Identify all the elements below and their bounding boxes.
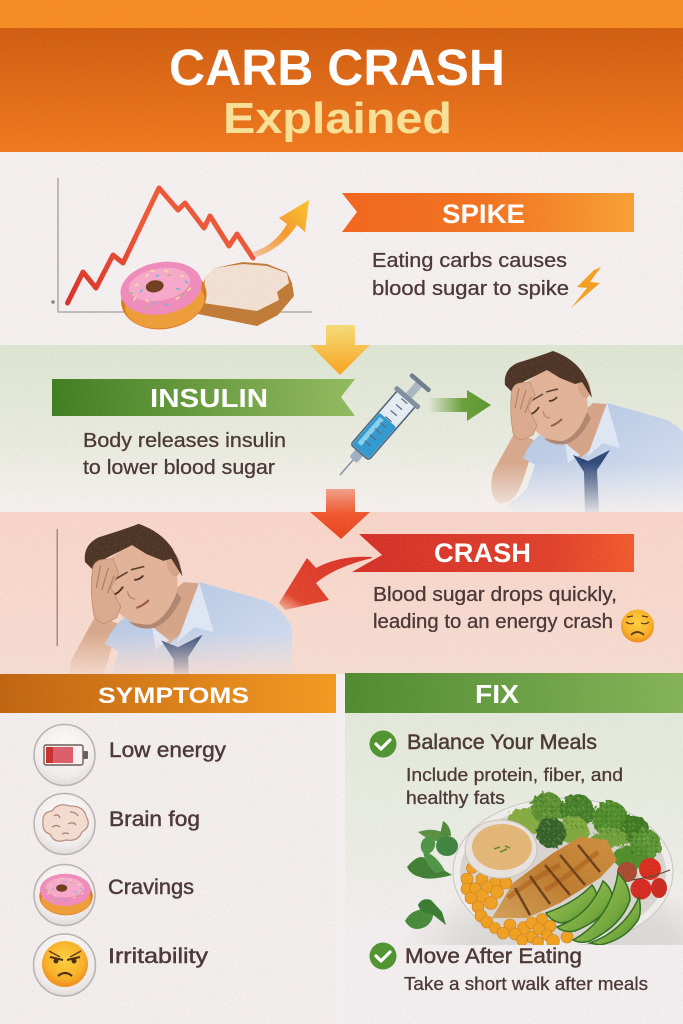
panel: symptoms [0, 674, 336, 1024]
illustration: man with hand on forehead, crash section [60, 524, 310, 708]
plate [453, 798, 673, 946]
heading: fix: FIX [475, 679, 520, 709]
item: balance your meals: Balance Your Meals [407, 731, 597, 754]
panel: insulin section background [0, 345, 683, 512]
title: Carb Crash: CARB CRASH [169, 39, 505, 96]
banner: insulin: INSULIN [150, 383, 268, 413]
heading: fix [345, 673, 683, 713]
banner: crash: CRASH [434, 538, 531, 568]
tomatoes [617, 858, 670, 900]
arrow: green right arrow [428, 390, 491, 421]
arrow: red curved arrow [279, 557, 372, 610]
text: insulin description [83, 430, 286, 479]
chickpeas [461, 862, 573, 948]
text: move description: Take a short walk after meals [404, 973, 648, 994]
item: move after eating [370, 942, 582, 970]
illustration: man with hand on forehead, insulin section [480, 351, 683, 515]
icon: basil leaves [405, 821, 458, 929]
panel: spike [51, 178, 634, 336]
panel: crash section background [0, 512, 683, 674]
item: cravings: Cravings [108, 876, 194, 899]
divider: vertical rule [56, 529, 58, 646]
icon: tired face emoji [621, 610, 654, 642]
panel: fix [345, 673, 683, 1024]
text: crash description [373, 584, 617, 633]
subtitle: Explained: Explained [223, 94, 452, 143]
heading: symptoms: SYMPTOMS [98, 683, 249, 708]
broccoli [506, 792, 661, 869]
item: balance your meals [370, 730, 597, 758]
banner: spike: SPIKE [442, 199, 525, 229]
text: insulin description: Body releases insulin [83, 430, 286, 452]
item: irritability: Irritability [108, 945, 209, 968]
panel: crash [56, 529, 654, 646]
chicken breast [492, 837, 617, 918]
heading: symptoms [0, 674, 336, 713]
text: insulin description: to lower blood sugar [83, 457, 275, 479]
text: balance description: Include protein, fiber, and [406, 764, 623, 785]
panel: insulin [52, 371, 491, 485]
illustration: healthy meal plate [400, 792, 683, 948]
text: balance description: healthy fats [406, 787, 505, 808]
arrow: yellow down arrow [310, 325, 370, 375]
text: crash description: Blood sugar drops quickly, [373, 584, 617, 606]
avocado slices [546, 873, 640, 945]
banner: insulin [52, 379, 355, 416]
text: spike description: blood sugar to spike [372, 278, 569, 300]
item: irritability [34, 934, 209, 996]
text: balance description [406, 764, 623, 808]
icon: syringe [328, 371, 434, 485]
item: low energy [34, 724, 227, 786]
chart: blood sugar line [51, 178, 312, 312]
icon: lightning bolt [571, 267, 601, 308]
arrow: red down arrow [310, 489, 370, 539]
panel: title banner [0, 0, 683, 152]
text: spike description: Eating carbs causes [372, 250, 567, 272]
bowl of hummus [465, 820, 537, 878]
item: brain fog: Brain fog [109, 808, 200, 831]
banner: spike [342, 193, 634, 232]
banner: crash [352, 534, 634, 572]
text: spike description [372, 250, 569, 300]
fade below plate edge [345, 945, 683, 1024]
arrow: rising yellow arrow [253, 200, 309, 257]
item: cravings [34, 864, 194, 926]
item: low energy: Low energy [109, 739, 227, 762]
text: crash description: leading to an energy crash [373, 611, 613, 633]
icon: bread slice [193, 262, 294, 326]
item: brain fog [34, 794, 200, 854]
icon: donut [115, 255, 212, 336]
item: move after eating: Move After Eating [405, 945, 582, 968]
